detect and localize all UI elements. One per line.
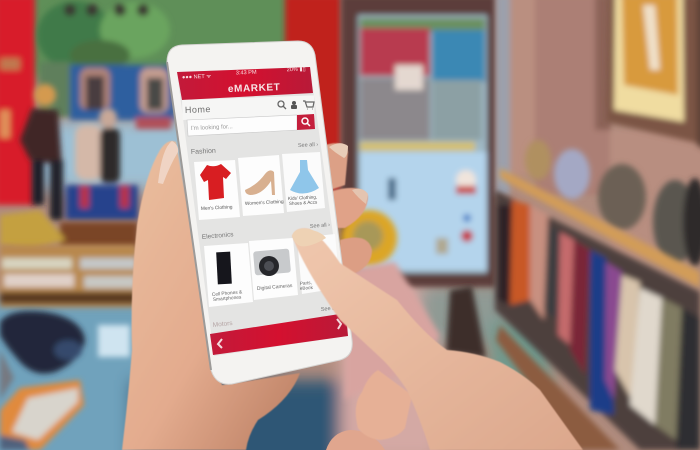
Fashion section: See all › bbox=[298, 142, 318, 149]
app header bbox=[177, 67, 313, 100]
pink clothing pile and dark bag bbox=[345, 262, 486, 400]
wooden shelf bbox=[500, 168, 700, 288]
icon: cart bbox=[303, 101, 314, 109]
status bar text: ●●● NET ᯤ bbox=[182, 74, 212, 81]
fingers on the right of the phone bbox=[322, 143, 372, 275]
hanging clothes bbox=[495, 190, 700, 450]
card: cell phones: Cell Phones & bbox=[212, 289, 243, 298]
status bar text: 3:43 PM bbox=[236, 70, 257, 76]
app title: eMARKET bbox=[228, 82, 281, 95]
card: partly hidden: Parts, bbox=[300, 280, 312, 286]
green foliage with blue building bbox=[37, 1, 175, 129]
search bar bbox=[187, 114, 315, 136]
brick wall bbox=[496, 0, 700, 260]
phone side edge bbox=[167, 62, 211, 370]
card: kids clothing: Kids' Clothing, bbox=[288, 194, 317, 201]
left arrow bbox=[218, 339, 222, 348]
red central column bbox=[285, 0, 341, 190]
Motors section bbox=[212, 305, 338, 329]
yellow round decoration bbox=[341, 210, 397, 266]
lower finger bbox=[326, 430, 385, 450]
home row bbox=[182, 95, 315, 120]
bottom navigation bar bbox=[210, 313, 348, 355]
card: men's clothing: Men's Clothing bbox=[201, 204, 233, 212]
Motors section: See all bbox=[321, 305, 338, 313]
icon: user bbox=[291, 101, 297, 109]
orange and white book bbox=[0, 350, 84, 450]
card: digital cameras: Digital Cameras bbox=[257, 283, 293, 292]
framed poster bbox=[606, 0, 700, 150]
palm and thumb bbox=[122, 141, 300, 450]
thumb nail bbox=[158, 141, 178, 184]
right arrow bbox=[337, 319, 341, 329]
Fashion section: Fashion bbox=[191, 148, 216, 156]
Electronics section: Electronics bbox=[202, 231, 235, 241]
fingernails bbox=[329, 143, 348, 158]
index finger and hand bbox=[292, 228, 583, 450]
yellow goods and brown counter bbox=[0, 210, 138, 250]
fingernail bbox=[292, 229, 326, 246]
lower shelf bbox=[496, 325, 620, 450]
right hand pointing at screen bbox=[292, 228, 583, 450]
smartphone bbox=[167, 41, 352, 384]
left merchandise shelves bbox=[0, 245, 136, 307]
Fashion section bbox=[191, 142, 325, 220]
left red pillar bbox=[0, 0, 35, 205]
card: cell phones: Smartphones bbox=[213, 294, 242, 303]
white floor highlight bbox=[98, 325, 130, 357]
shelf items bbox=[525, 140, 700, 266]
card: kids clothing: Shoes & Accs bbox=[289, 199, 318, 206]
blurred shoppers bbox=[20, 84, 138, 220]
thumb bbox=[356, 370, 412, 440]
Electronics section bbox=[202, 222, 340, 307]
screen bbox=[177, 67, 347, 356]
card: women's clothing: Women's Clothing bbox=[245, 199, 284, 207]
left hand behind phone bbox=[122, 141, 372, 450]
card: cell phones bbox=[204, 243, 253, 307]
status bar text bbox=[182, 67, 306, 81]
glass door bbox=[341, 0, 496, 287]
Electronics section: See all › bbox=[310, 222, 330, 230]
dark bowl bbox=[0, 311, 85, 374]
status bar text: 20% ▮▯ bbox=[287, 67, 306, 73]
phone body bbox=[167, 41, 352, 384]
icon: search bbox=[278, 101, 286, 109]
search bar: I'm looking for... bbox=[191, 124, 233, 132]
card: partly hidden bbox=[297, 234, 340, 294]
home row: Home bbox=[185, 104, 211, 115]
card: partly hidden: eBook bbox=[300, 285, 314, 291]
card: kids clothing bbox=[282, 152, 325, 212]
Motors section: Motors bbox=[212, 320, 234, 329]
